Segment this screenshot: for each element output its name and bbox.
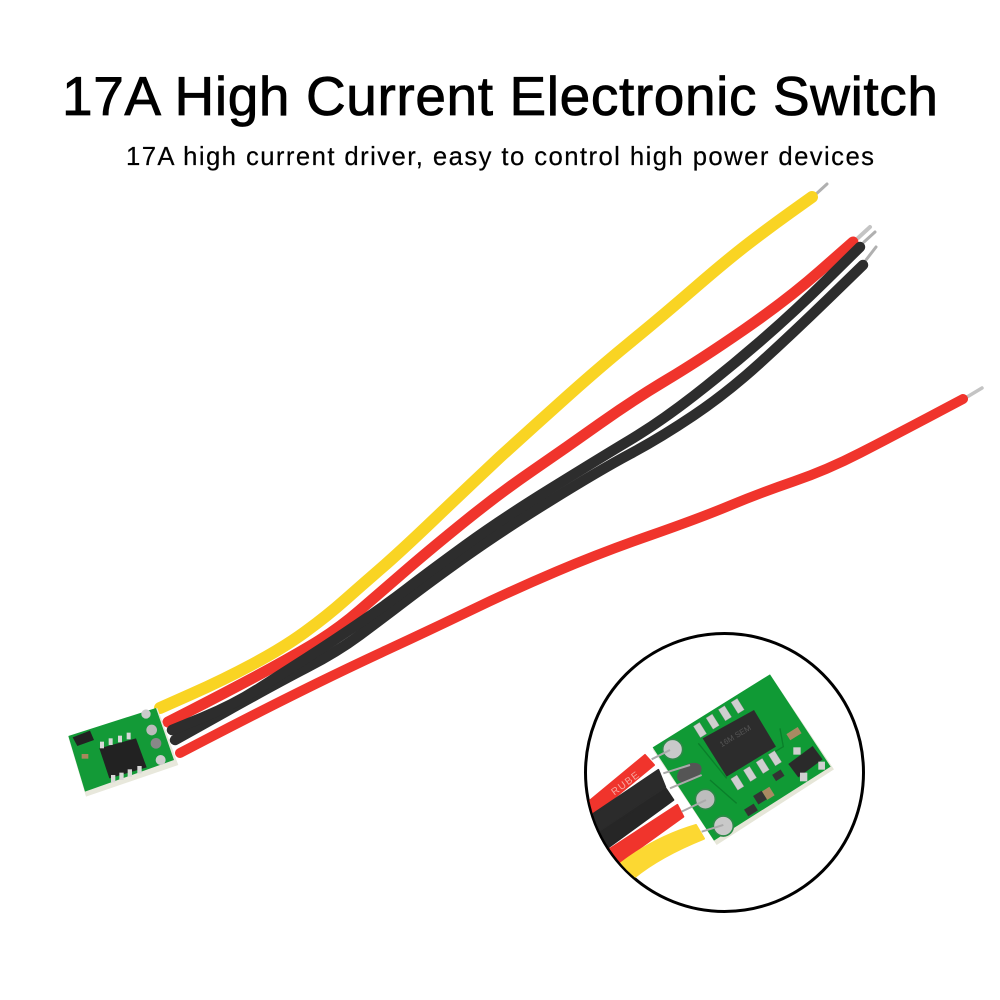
inset chip: [703, 710, 776, 777]
inset traces: [698, 728, 783, 803]
inset close-up: [587, 674, 834, 878]
wire: thin red: [180, 388, 982, 753]
wire: yellow: [160, 184, 827, 708]
wire: black upper: [172, 232, 875, 730]
inset board: [653, 674, 834, 845]
wire: black lower: [175, 247, 876, 740]
small circuit board: [68, 708, 178, 797]
inset solder joints: [652, 739, 733, 836]
wire: red: [168, 227, 870, 722]
inset transistor: [788, 746, 823, 777]
wire label: RUBE: [610, 769, 643, 798]
subtitle: 17A high current driver, easy to control high power devices: [126, 143, 874, 171]
wires bundle: [160, 184, 982, 753]
inset chip label: 16M SEM: [718, 723, 753, 749]
small chip: [99, 738, 147, 778]
inset magnifier circle: [586, 634, 864, 912]
inset wires: [587, 755, 704, 878]
title: 17A High Current Electronic Switch: [62, 65, 938, 127]
